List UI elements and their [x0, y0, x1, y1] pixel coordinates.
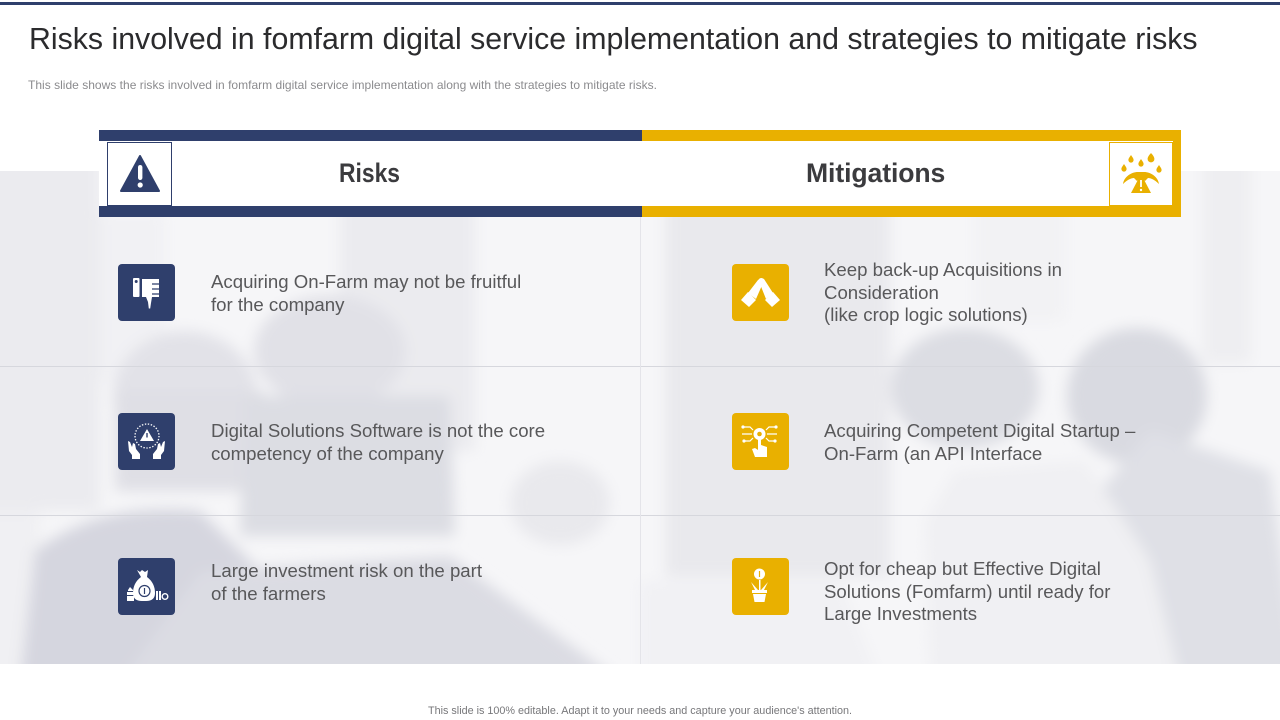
text: risk 1 [211, 271, 521, 315]
icon: money plant [732, 558, 789, 615]
left wall [0, 171, 96, 507]
background photo, blurred and tinted [0, 171, 1280, 664]
text: mitigation 1: Keep back-up Acquisitions in [824, 259, 1062, 280]
footer note: This slide is 100% editable. Adapt it to your needs and capture your audience's attention. [428, 705, 852, 717]
icon: mitigation handshake [732, 264, 789, 321]
text: risk 2 [211, 420, 545, 464]
text: risk 3: Large investment risk on the part [211, 560, 482, 581]
text: mitigation 1: (like crop logic solutions) [824, 304, 1028, 325]
header inner band [642, 141, 1173, 206]
heading: mitigations: Mitigations [806, 158, 945, 188]
left people [114, 330, 256, 393]
text: risk 2: competency of the company [211, 443, 444, 464]
text: risk 3: of the farmers [211, 583, 326, 604]
icon: thumbs down [118, 264, 175, 321]
text: mitigation 2: On-Farm (an API Interface [824, 443, 1042, 464]
text: risk 1: for the company [211, 294, 344, 315]
text: mitigation 3 [824, 558, 1110, 624]
right people [891, 328, 1039, 448]
text: risk 1: Acquiring On-Farm may not be fruitful [211, 271, 521, 292]
subtitle: This slide shows the risks involved in fomfarm digital service implementation along with the strategies to mitigate risks. [28, 78, 657, 92]
text: risk 2: Digital Solutions Software is not the core [211, 420, 545, 441]
panel: mitigations header [642, 130, 1181, 217]
text: risk 3 [211, 560, 482, 604]
header inner band [99, 141, 642, 206]
icon: warning triangle [107, 142, 172, 206]
icon: touch technology [732, 413, 789, 470]
text: mitigation 1 [824, 259, 1062, 325]
panel: risks header [99, 130, 642, 217]
text: mitigation 2 [824, 420, 1136, 464]
title: Risks involved in fomfarm digital service implementation and strategies to mitigate risks [29, 23, 1198, 56]
text: mitigation 1: Consideration [824, 282, 939, 303]
text: mitigation 3: Large Investments [824, 603, 977, 624]
right wall [665, 201, 890, 577]
icon: money bag [118, 558, 175, 615]
icon: hazard rain [1109, 142, 1173, 206]
text: mitigation 2: Acquiring Competent Digital Startup – [824, 420, 1135, 441]
text: mitigation 3: Opt for cheap but Effective Digital [824, 558, 1101, 579]
icon: hands protecting warning [118, 413, 175, 470]
text: mitigation 3: Solutions (Fomfarm) until ready for [824, 581, 1110, 602]
heading: risks: Risks [339, 158, 400, 188]
top border line [0, 2, 1280, 5]
